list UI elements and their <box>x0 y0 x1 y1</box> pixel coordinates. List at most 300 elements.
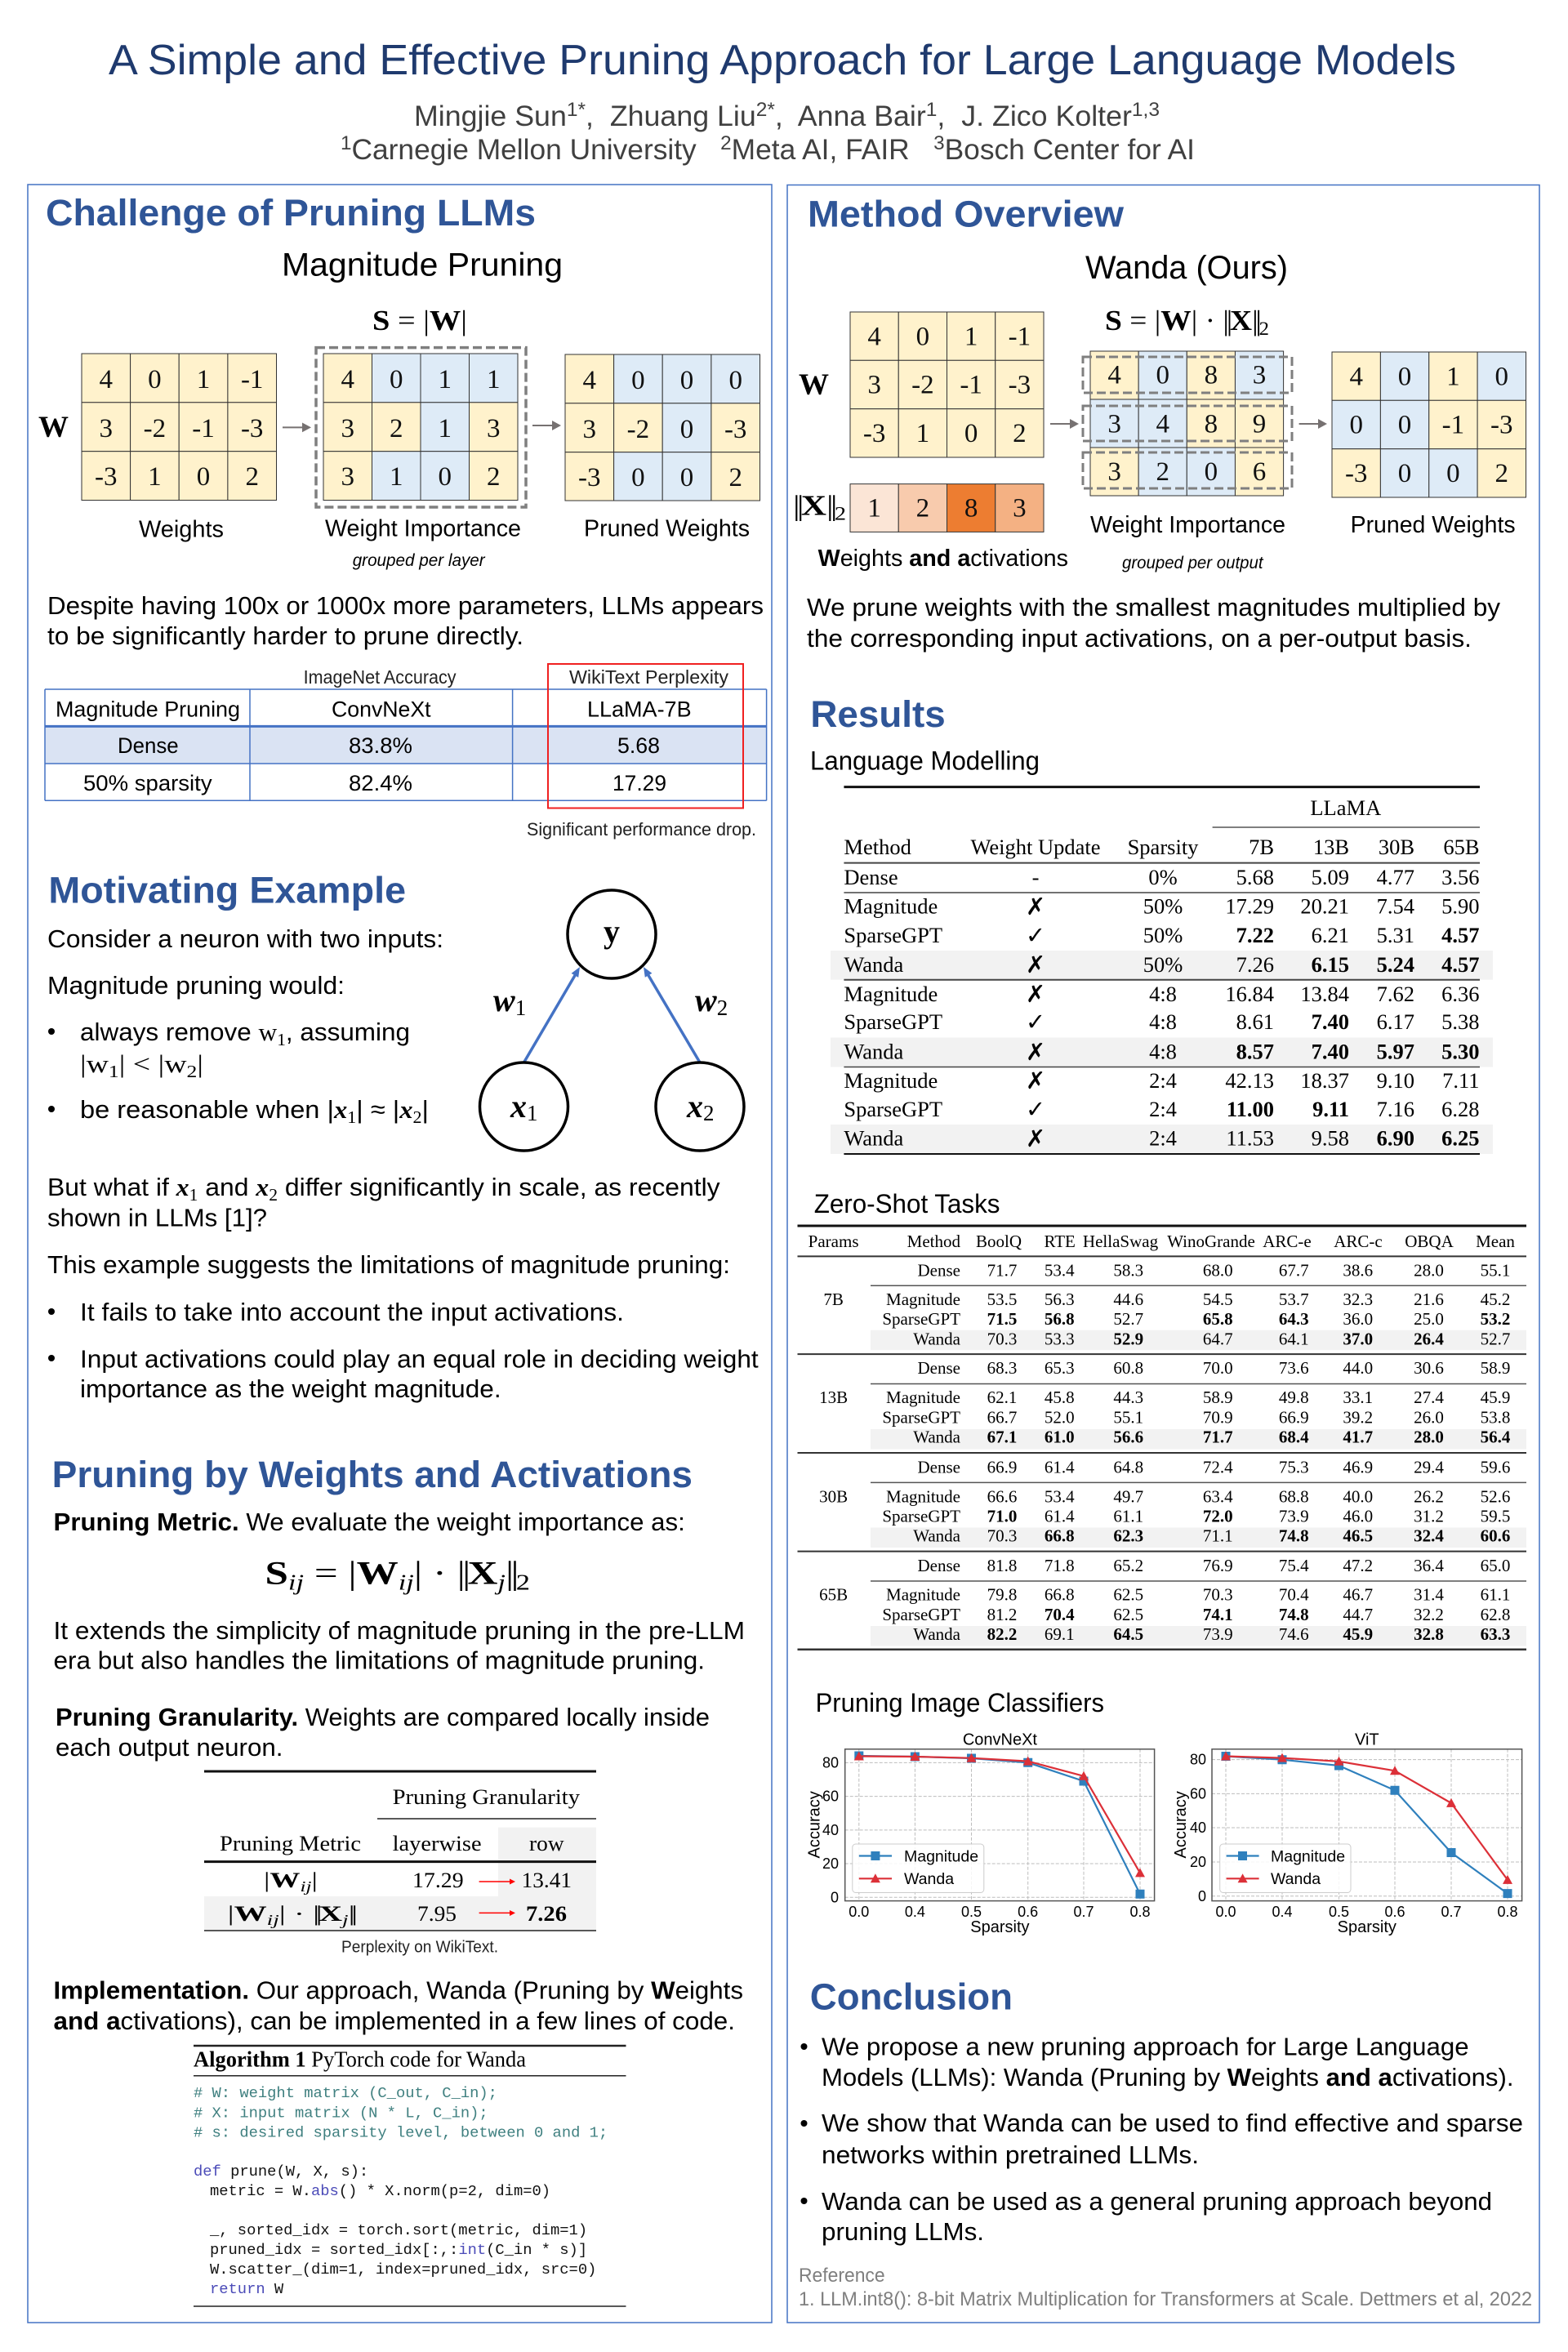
grid: pruned weights: 0 <box>728 366 742 395</box>
chart: ViT: 0.0 <box>1215 1904 1236 1920</box>
bullet: input activations <box>48 1344 759 1403</box>
table: zero-shot tasks: 31.2 <box>1414 1506 1444 1526</box>
table: language modelling: 20.21 <box>1300 894 1349 919</box>
table: language modelling: 7.54 <box>1377 894 1414 919</box>
grid: pruned weights: 0 <box>631 366 645 395</box>
table: zero-shot tasks: 59.5 <box>1481 1506 1510 1526</box>
table: zero-shot tasks: Magnitude <box>886 1290 960 1309</box>
table: language modelling: ✗ <box>1026 1067 1045 1094</box>
label: X norm: 2 <box>835 504 846 524</box>
heading: conclusion: Conclusion <box>810 1976 1013 2017</box>
chart: ConvNeXt: 40 <box>822 1822 839 1838</box>
authors: , J. Zico Kolter <box>937 100 1132 132</box>
table: pruning granularity: Pruning Metric <box>220 1831 361 1855</box>
table: zero-shot tasks: 30B <box>819 1486 848 1506</box>
table: zero-shot tasks: Params <box>808 1232 859 1251</box>
table: zero-shot tasks: Wanda <box>913 1526 961 1545</box>
table: language modelling: ✗ <box>1026 1125 1045 1152</box>
grid: W right: -3 <box>1009 371 1031 400</box>
table: zero-shot tasks: 65.8 <box>1203 1309 1233 1329</box>
table: zero-shot tasks: 66.7 <box>987 1407 1017 1427</box>
grid: pruned right: -1 <box>1442 411 1464 440</box>
table: zero-shot tasks: BoolQ <box>976 1232 1022 1251</box>
arrow: importance to pruned <box>532 421 561 430</box>
bullet: we show: networks within pretrained LLMs. <box>822 2140 1199 2169</box>
table: zero-shot tasks: 73.9 <box>1203 1624 1233 1644</box>
label: X norm: ||X|| <box>793 490 833 522</box>
grid: importance right: 2 <box>1156 457 1169 487</box>
chart: ViT: 0.5 <box>1329 1904 1349 1920</box>
text: but what if: 1 <box>189 1185 198 1205</box>
table: zero-shot tasks: 52.6 <box>1481 1486 1510 1506</box>
table: zero-shot tasks: 58.9 <box>1203 1388 1233 1407</box>
arrow: W to importance <box>1050 419 1079 429</box>
code: algorithm 1: # W: weight matrix (C_out, C_in); <box>194 2084 497 2102</box>
table: zero-shot tasks: 70.3 <box>987 1526 1017 1545</box>
table: zero-shot tasks: 53.8 <box>1481 1407 1510 1427</box>
affiliations: Meta AI, FAIR <box>732 134 933 166</box>
bullet: we show <box>800 2109 1523 2169</box>
caption: perplexity: Perplexity on WikiText. <box>341 1939 498 1957</box>
table: language modelling: 7B <box>1249 835 1274 859</box>
table: zero-shot tasks: Dense <box>918 1556 960 1575</box>
diagram: neuron: x <box>687 1088 703 1125</box>
table: zero-shot tasks: 46.0 <box>1343 1506 1373 1526</box>
table: language modelling: ✗ <box>1026 980 1045 1008</box>
table: magnitude pruning results: Dense <box>118 733 179 758</box>
table: zero-shot tasks: 65B <box>819 1585 848 1605</box>
table: zero-shot tasks: SparseGPT <box>882 1407 960 1427</box>
table: zero-shot tasks: Wanda <box>913 1624 961 1644</box>
grid: importance right: 6 <box>1253 457 1266 487</box>
table: magnitude pruning results: 83.8% <box>349 733 412 758</box>
table: language modelling: 4.77 <box>1377 865 1414 889</box>
table: zero-shot tasks: 63.3 <box>1481 1624 1510 1644</box>
table: zero-shot tasks: 67.1 <box>987 1427 1017 1446</box>
table: language modelling: - <box>1032 865 1039 889</box>
table: zero-shot tasks: 52.0 <box>1045 1407 1075 1427</box>
bullet: input activations: importance as the weight magnitude. <box>80 1374 501 1403</box>
bullet: always remove: 2 <box>187 1062 197 1081</box>
table: zero-shot tasks: 53.5 <box>987 1290 1017 1309</box>
label: weights and activations: Weights and activations <box>818 546 1068 572</box>
chart: ViT: Accuracy <box>1172 1791 1190 1859</box>
text: consider: Consider a neuron with two inputs: <box>47 924 443 953</box>
table: zero-shot tasks: 32.2 <box>1414 1605 1444 1624</box>
table: pruning granularity: | · <box>279 1901 313 1926</box>
chart: ConvNeXt: 0 <box>831 1889 839 1905</box>
table: language modelling: 5.97 <box>1377 1040 1414 1064</box>
text: magnitude pruning would: Magnitude pruning would: <box>47 971 345 1000</box>
table: zero-shot tasks: 28.0 <box>1414 1261 1444 1281</box>
reference: Reference <box>799 2265 885 2287</box>
table: zero-shot tasks: 28.0 <box>1414 1427 1444 1446</box>
grid: pruned right: 0 <box>1349 411 1363 440</box>
table: zero-shot tasks: 66.9 <box>987 1458 1017 1477</box>
text: it extends <box>54 1616 745 1675</box>
label: pruned weights right: Pruned Weights <box>1351 512 1516 538</box>
label: weight importance right: Weight Importance <box>1090 512 1285 538</box>
table: zero-shot tasks: 61.1 <box>1481 1585 1510 1605</box>
table: zero-shot tasks: 26.0 <box>1414 1407 1444 1427</box>
affiliations: 2 <box>720 132 732 154</box>
table: zero-shot tasks: 44.0 <box>1343 1358 1373 1378</box>
table: language modelling: 6.28 <box>1441 1097 1480 1121</box>
table: zero-shot tasks: 65.0 <box>1481 1556 1510 1575</box>
affiliations: Carnegie Mellon University <box>351 134 720 166</box>
table: zero-shot tasks: Method <box>907 1232 960 1251</box>
grid: W right: 0 <box>916 322 929 351</box>
table: zero-shot tasks: 79.8 <box>987 1585 1017 1605</box>
table: zero-shot tasks: Dense <box>918 1358 960 1378</box>
table: language modelling: SparseGPT <box>844 1009 942 1034</box>
table: zero-shot tasks: 68.0 <box>1203 1261 1233 1281</box>
table: zero-shot tasks: 56.4 <box>1481 1427 1511 1446</box>
table: language modelling: 6.90 <box>1377 1126 1414 1151</box>
text: but what if: But what if x <box>47 1173 189 1201</box>
text: but what if: and <box>198 1173 256 1201</box>
bullet: be reasonable: be reasonable when | x <box>80 1095 346 1124</box>
arrow: importance to pruned right <box>1299 419 1327 429</box>
panel: left column <box>28 185 772 2323</box>
label: weights: Weights <box>139 516 224 542</box>
chart: ViT <box>1172 1731 1522 1936</box>
formula: S = |W| ||X||: 2 <box>1259 318 1269 339</box>
table: pruning granularity: layerwise <box>393 1831 482 1855</box>
chart: ConvNeXt: Sparsity <box>970 1918 1030 1936</box>
table: zero-shot tasks: 61.4 <box>1045 1506 1075 1526</box>
text: implementation: Implementation. Our approach, Wanda (Pruning by Weights <box>54 1976 743 2005</box>
table: language modelling: 5.90 <box>1441 894 1480 919</box>
grid: pruned weights: 0 <box>680 366 693 395</box>
table: language modelling: 6.17 <box>1377 1009 1414 1034</box>
table: zero-shot tasks: 44.6 <box>1113 1290 1143 1309</box>
text: but what if: x <box>255 1173 269 1201</box>
table: zero-shot tasks: SparseGPT <box>882 1506 960 1526</box>
grid: pruned right: 0 <box>1398 411 1411 440</box>
table: zero-shot tasks: 21.6 <box>1414 1290 1444 1309</box>
heading: pruning by weights and activations: Pruning by Weights and Activations <box>52 1454 693 1495</box>
heading: motivating example: Motivating Example <box>48 870 406 911</box>
heading: results: Results <box>810 693 946 735</box>
authors: 2* <box>756 99 775 121</box>
table: language modelling: ✓ <box>1026 1095 1045 1123</box>
highlight: red box <box>548 664 743 808</box>
diagram: neuron: 1 <box>515 996 526 1020</box>
bullet: always remove: 1 <box>277 1030 286 1049</box>
chart: ViT: 0 <box>1198 1888 1206 1904</box>
grid: weight importance: 0 <box>438 462 452 492</box>
grid: pruned right: -3 <box>1490 411 1513 440</box>
table: language modelling: 2:4 <box>1149 1097 1177 1121</box>
grid: weights: -1 <box>241 365 263 394</box>
table: language modelling: 7.40 <box>1312 1040 1349 1064</box>
diagram: neuron: 1 <box>527 1101 537 1125</box>
table: zero-shot tasks: 37.0 <box>1343 1329 1373 1348</box>
code: algorithm 1: W.scatter_(dim=1, index=pruned_idx, src=0) <box>210 2261 596 2278</box>
table: zero-shot tasks: 32.8 <box>1414 1624 1444 1644</box>
grid: W right: -1 <box>1009 322 1031 351</box>
authors: 1 <box>926 99 937 121</box>
table: zero-shot tasks: 69.1 <box>1045 1624 1075 1644</box>
table: zero-shot tasks: 61.0 <box>1045 1427 1075 1446</box>
table: language modelling: 65B <box>1443 835 1480 859</box>
table: zero-shot tasks: 46.7 <box>1343 1585 1373 1605</box>
grid: weights: 3 <box>100 414 113 443</box>
table: zero-shot tasks: 60.6 <box>1481 1526 1510 1545</box>
table: zero-shot tasks: 71.1 <box>1203 1526 1233 1545</box>
table: zero-shot tasks: 82.2 <box>987 1624 1017 1644</box>
table: zero-shot tasks: 68.4 <box>1279 1427 1309 1446</box>
table: language modelling: 9.11 <box>1312 1097 1349 1121</box>
table: magnitude pruning results: 17.29 <box>612 771 666 795</box>
text: we prune: the corresponding input activations, on a per-output basis. <box>807 624 1472 653</box>
table: language modelling: 13.84 <box>1300 982 1349 1006</box>
code: algorithm 1 <box>194 2046 626 2306</box>
grid: importance right: 3 <box>1253 360 1266 390</box>
table: language modelling: Wanda <box>844 1040 904 1064</box>
table: zero-shot tasks: Magnitude <box>886 1388 960 1407</box>
grid: W right <box>850 312 1044 457</box>
chart: ConvNeXt: 20 <box>822 1855 839 1872</box>
diagram: neuron: 2 <box>717 996 728 1020</box>
chart: ViT: 0.7 <box>1441 1904 1462 1920</box>
grid: weights: -3 <box>241 414 263 443</box>
table: language modelling: 6.36 <box>1441 982 1480 1006</box>
grid: weight importance: 2 <box>487 462 500 492</box>
table: zero-shot tasks: Magnitude <box>886 1585 960 1605</box>
code: algorithm 1: pruned_idx = sorted_idx[:,:int(C_in * s)] <box>210 2241 587 2259</box>
table: zero-shot tasks: 32.3 <box>1343 1290 1373 1309</box>
table: zero-shot tasks: HellaSwag <box>1083 1232 1159 1251</box>
grid: activations: 8 <box>964 494 978 523</box>
grid: weights: 0 <box>148 365 162 394</box>
table: language modelling: 50% <box>1143 923 1183 947</box>
table: pruning granularity: || <box>349 1901 356 1926</box>
grid: activations: 2 <box>916 494 929 523</box>
table: language modelling: 7.40 <box>1312 1009 1349 1034</box>
bullet: be reasonable <box>48 1095 429 1127</box>
bullet: be reasonable: | <box>422 1095 429 1124</box>
diagram: neuron: w <box>695 982 717 1018</box>
table: language modelling: 4:8 <box>1149 1009 1177 1034</box>
chart: ConvNeXt: Wanda <box>904 1870 954 1888</box>
table: language modelling: 6.21 <box>1312 923 1349 947</box>
diagram: neuron: y <box>604 913 620 950</box>
table: zero-shot tasks: Dense <box>918 1261 960 1281</box>
subheading: zero-shot tasks: Zero-Shot Tasks <box>814 1189 1000 1218</box>
grid: importance right: 4 <box>1107 360 1121 390</box>
grid: W right: 1 <box>964 322 978 351</box>
table: zero-shot tasks: 64.3 <box>1279 1309 1309 1329</box>
table: pruning granularity: 13.41 <box>522 1868 572 1892</box>
table: zero-shot tasks: 55.1 <box>1113 1407 1143 1427</box>
table: language modelling <box>831 787 1493 1154</box>
table: zero-shot tasks: 26.2 <box>1414 1486 1444 1506</box>
diagram: neuron: 2 <box>703 1101 714 1125</box>
table: zero-shot tasks: 71.0 <box>987 1506 1017 1526</box>
note: grouped per layer: grouped per layer <box>353 551 486 570</box>
grid: W right: 3 <box>867 371 881 400</box>
table: language modelling: 7.22 <box>1236 923 1274 947</box>
grid: weight importance <box>323 354 518 500</box>
chart: ConvNeXt: Magnitude <box>904 1847 978 1865</box>
table: language modelling: 8.61 <box>1236 1009 1274 1034</box>
grid: weights: 2 <box>245 462 259 492</box>
table: zero-shot tasks: 53.4 <box>1045 1261 1075 1281</box>
table: language modelling: ✗ <box>1026 951 1045 978</box>
grid: weights: 1 <box>148 462 162 492</box>
table: zero-shot tasks: 66.9 <box>1279 1407 1309 1427</box>
chart: ConvNeXt: ConvNeXt <box>963 1731 1037 1748</box>
table: zero-shot tasks: 61.4 <box>1045 1458 1075 1477</box>
table: zero-shot tasks: 62.5 <box>1113 1605 1143 1624</box>
table: zero-shot tasks: 73.6 <box>1279 1358 1309 1378</box>
label: W right: W <box>799 368 829 402</box>
table: zero-shot tasks: 26.4 <box>1414 1329 1444 1348</box>
label: W: W <box>38 411 69 444</box>
table: zero-shot tasks: 56.6 <box>1113 1427 1143 1446</box>
text: we prune: We prune weights with the smallest magnitudes multiplied by <box>807 593 1501 621</box>
grid: W right: -3 <box>863 419 885 448</box>
table: zero-shot tasks: 71.7 <box>987 1261 1017 1281</box>
table: zero-shot tasks: SparseGPT <box>882 1605 960 1624</box>
table: magnitude pruning results: ImageNet Accuracy <box>304 666 457 688</box>
diagram: neuron: x <box>510 1088 527 1125</box>
table: language modelling: 4:8 <box>1149 982 1177 1006</box>
table: zero-shot tasks: 40.0 <box>1343 1486 1373 1506</box>
grid: activations <box>850 484 1044 532</box>
chart: ConvNeXt: 0.7 <box>1073 1904 1094 1920</box>
table: language modelling: ✗ <box>1026 893 1045 920</box>
table: zero-shot tasks: 64.8 <box>1113 1458 1143 1477</box>
table: zero-shot tasks: 56.8 <box>1045 1309 1075 1329</box>
grid: pruned right: 0 <box>1495 362 1508 391</box>
table: pruning granularity: | <box>312 1868 318 1892</box>
text: but what if: 2 <box>269 1185 278 1205</box>
table: zero-shot tasks: 45.2 <box>1481 1290 1510 1309</box>
text: pruning metric: Pruning Metric. We evaluate the weight importance as: <box>54 1508 685 1536</box>
table: zero-shot tasks: 27.4 <box>1414 1388 1444 1407</box>
table: zero-shot tasks: 70.3 <box>987 1329 1017 1348</box>
table: zero-shot tasks: 71.5 <box>987 1309 1017 1329</box>
chart: ViT: 60 <box>1190 1785 1206 1802</box>
table: language modelling: 50% <box>1143 952 1183 977</box>
panel: right column <box>787 185 1539 2323</box>
grid: pruned weights: 0 <box>680 415 693 444</box>
table: zero-shot tasks: RTE <box>1044 1232 1076 1251</box>
table: language modelling: 5.30 <box>1441 1040 1480 1064</box>
table: zero-shot tasks: 67.7 <box>1279 1261 1309 1281</box>
table: pruning granularity: 17.29 <box>412 1868 464 1892</box>
table: language modelling: 6.25 <box>1441 1126 1480 1151</box>
text: pruning granularity <box>56 1703 710 1762</box>
formula: S_ij: j <box>495 1570 506 1595</box>
bullet: we propose: We propose a new pruning approach for Large Language <box>822 2033 1469 2061</box>
table: language modelling: 42.13 <box>1225 1068 1274 1093</box>
grid: importance right: 3 <box>1107 409 1121 439</box>
formula: S = |W| ||X||: S = |W| · ||X|| <box>1105 305 1258 336</box>
code: algorithm 1: metric = W.abs() * X.norm(p=2, dim=0) <box>210 2182 550 2200</box>
title: A Simple and Effective Pruning Approach for Large Language Models <box>109 37 1456 84</box>
grid: weights: -3 <box>95 462 118 492</box>
table: language modelling: 50% <box>1143 894 1183 919</box>
table: language modelling: LLaMA <box>1310 795 1381 820</box>
grid: importance right: 0 <box>1156 360 1169 390</box>
affiliations: Bosch Center for AI <box>945 134 1195 166</box>
table: zero-shot tasks: 66.6 <box>987 1486 1017 1506</box>
table: zero-shot tasks: 31.4 <box>1414 1585 1444 1605</box>
table: zero-shot tasks: 36.0 <box>1343 1309 1373 1329</box>
table: language modelling: 4.57 <box>1441 952 1480 977</box>
table: language modelling: 18.37 <box>1300 1068 1349 1093</box>
table: zero-shot tasks: OBQA <box>1405 1232 1454 1251</box>
table: magnitude pruning results: 82.4% <box>349 771 412 795</box>
grid: weight importance: 3 <box>341 414 354 443</box>
grid: weights <box>82 354 276 500</box>
table: language modelling: 11.53 <box>1226 1126 1274 1151</box>
table: zero-shot tasks: 65.2 <box>1113 1556 1143 1575</box>
table: zero-shot tasks: 65.3 <box>1045 1358 1075 1378</box>
formula: S_ij: || <box>506 1555 516 1592</box>
text: we prune <box>807 593 1501 653</box>
chart: ViT: 20 <box>1190 1854 1206 1870</box>
bullet: be reasonable: 2 <box>412 1107 422 1127</box>
table: language modelling: 7.11 <box>1442 1068 1480 1093</box>
grid: importance right: 4 <box>1156 409 1169 439</box>
table: zero-shot tasks: 63.4 <box>1203 1486 1233 1506</box>
table: zero-shot tasks: 53.4 <box>1045 1486 1075 1506</box>
grid: pruned right: 0 <box>1398 459 1411 488</box>
bullet: always remove <box>48 1018 410 1081</box>
text: it extends: era but also handles the limitations of magnitude pruning. <box>54 1646 705 1675</box>
chart: ConvNeXt: 80 <box>822 1754 839 1771</box>
table: pruning granularity: ||X <box>313 1901 334 1926</box>
chart: ViT: 40 <box>1190 1820 1206 1836</box>
grid: activations: 3 <box>1013 494 1027 523</box>
table: zero-shot tasks: 58.9 <box>1481 1358 1510 1378</box>
table: zero-shot tasks: ARC-c <box>1334 1232 1383 1251</box>
text: limitations: This example suggests the limitations of magnitude pruning: <box>47 1250 730 1279</box>
table: magnitude pruning results: ConvNeXt <box>332 697 431 722</box>
bullet: always remove: always remove w <box>80 1018 277 1046</box>
bullet: always remove: | < |w <box>119 1049 187 1078</box>
table: zero-shot tasks: 72.4 <box>1203 1458 1233 1477</box>
subheading: language modelling: Language Modelling <box>810 746 1040 776</box>
table: language modelling: 4.57 <box>1441 923 1480 947</box>
reference <box>799 2265 1532 2310</box>
table: zero-shot tasks: 44.7 <box>1343 1605 1373 1624</box>
table: zero-shot tasks: 32.4 <box>1414 1526 1444 1545</box>
table: pruning granularity: j <box>340 1912 349 1928</box>
table: zero-shot tasks: 52.7 <box>1113 1309 1143 1329</box>
formula: S_ij: ||X <box>457 1555 491 1592</box>
table: pruning granularity: |W <box>228 1901 256 1926</box>
formula: S_ij: ij <box>399 1570 414 1595</box>
grid: pruned right: 0 <box>1446 459 1460 488</box>
text: pruning granularity: each output neuron. <box>56 1733 283 1762</box>
table: language modelling: Wanda <box>844 1126 904 1151</box>
table: zero-shot tasks: 70.4 <box>1279 1585 1309 1605</box>
table: zero-shot tasks: WinoGrande <box>1167 1232 1255 1251</box>
table: language modelling: Sparsity <box>1128 835 1199 859</box>
table: zero-shot tasks: 30.6 <box>1414 1358 1444 1378</box>
table: zero-shot tasks: 71.7 <box>1203 1427 1233 1446</box>
authors: 1* <box>567 99 586 121</box>
formula: S_ij: 2 <box>516 1570 530 1595</box>
table: zero-shot tasks: 33.1 <box>1343 1388 1373 1407</box>
grid: weight importance: 3 <box>341 462 354 492</box>
